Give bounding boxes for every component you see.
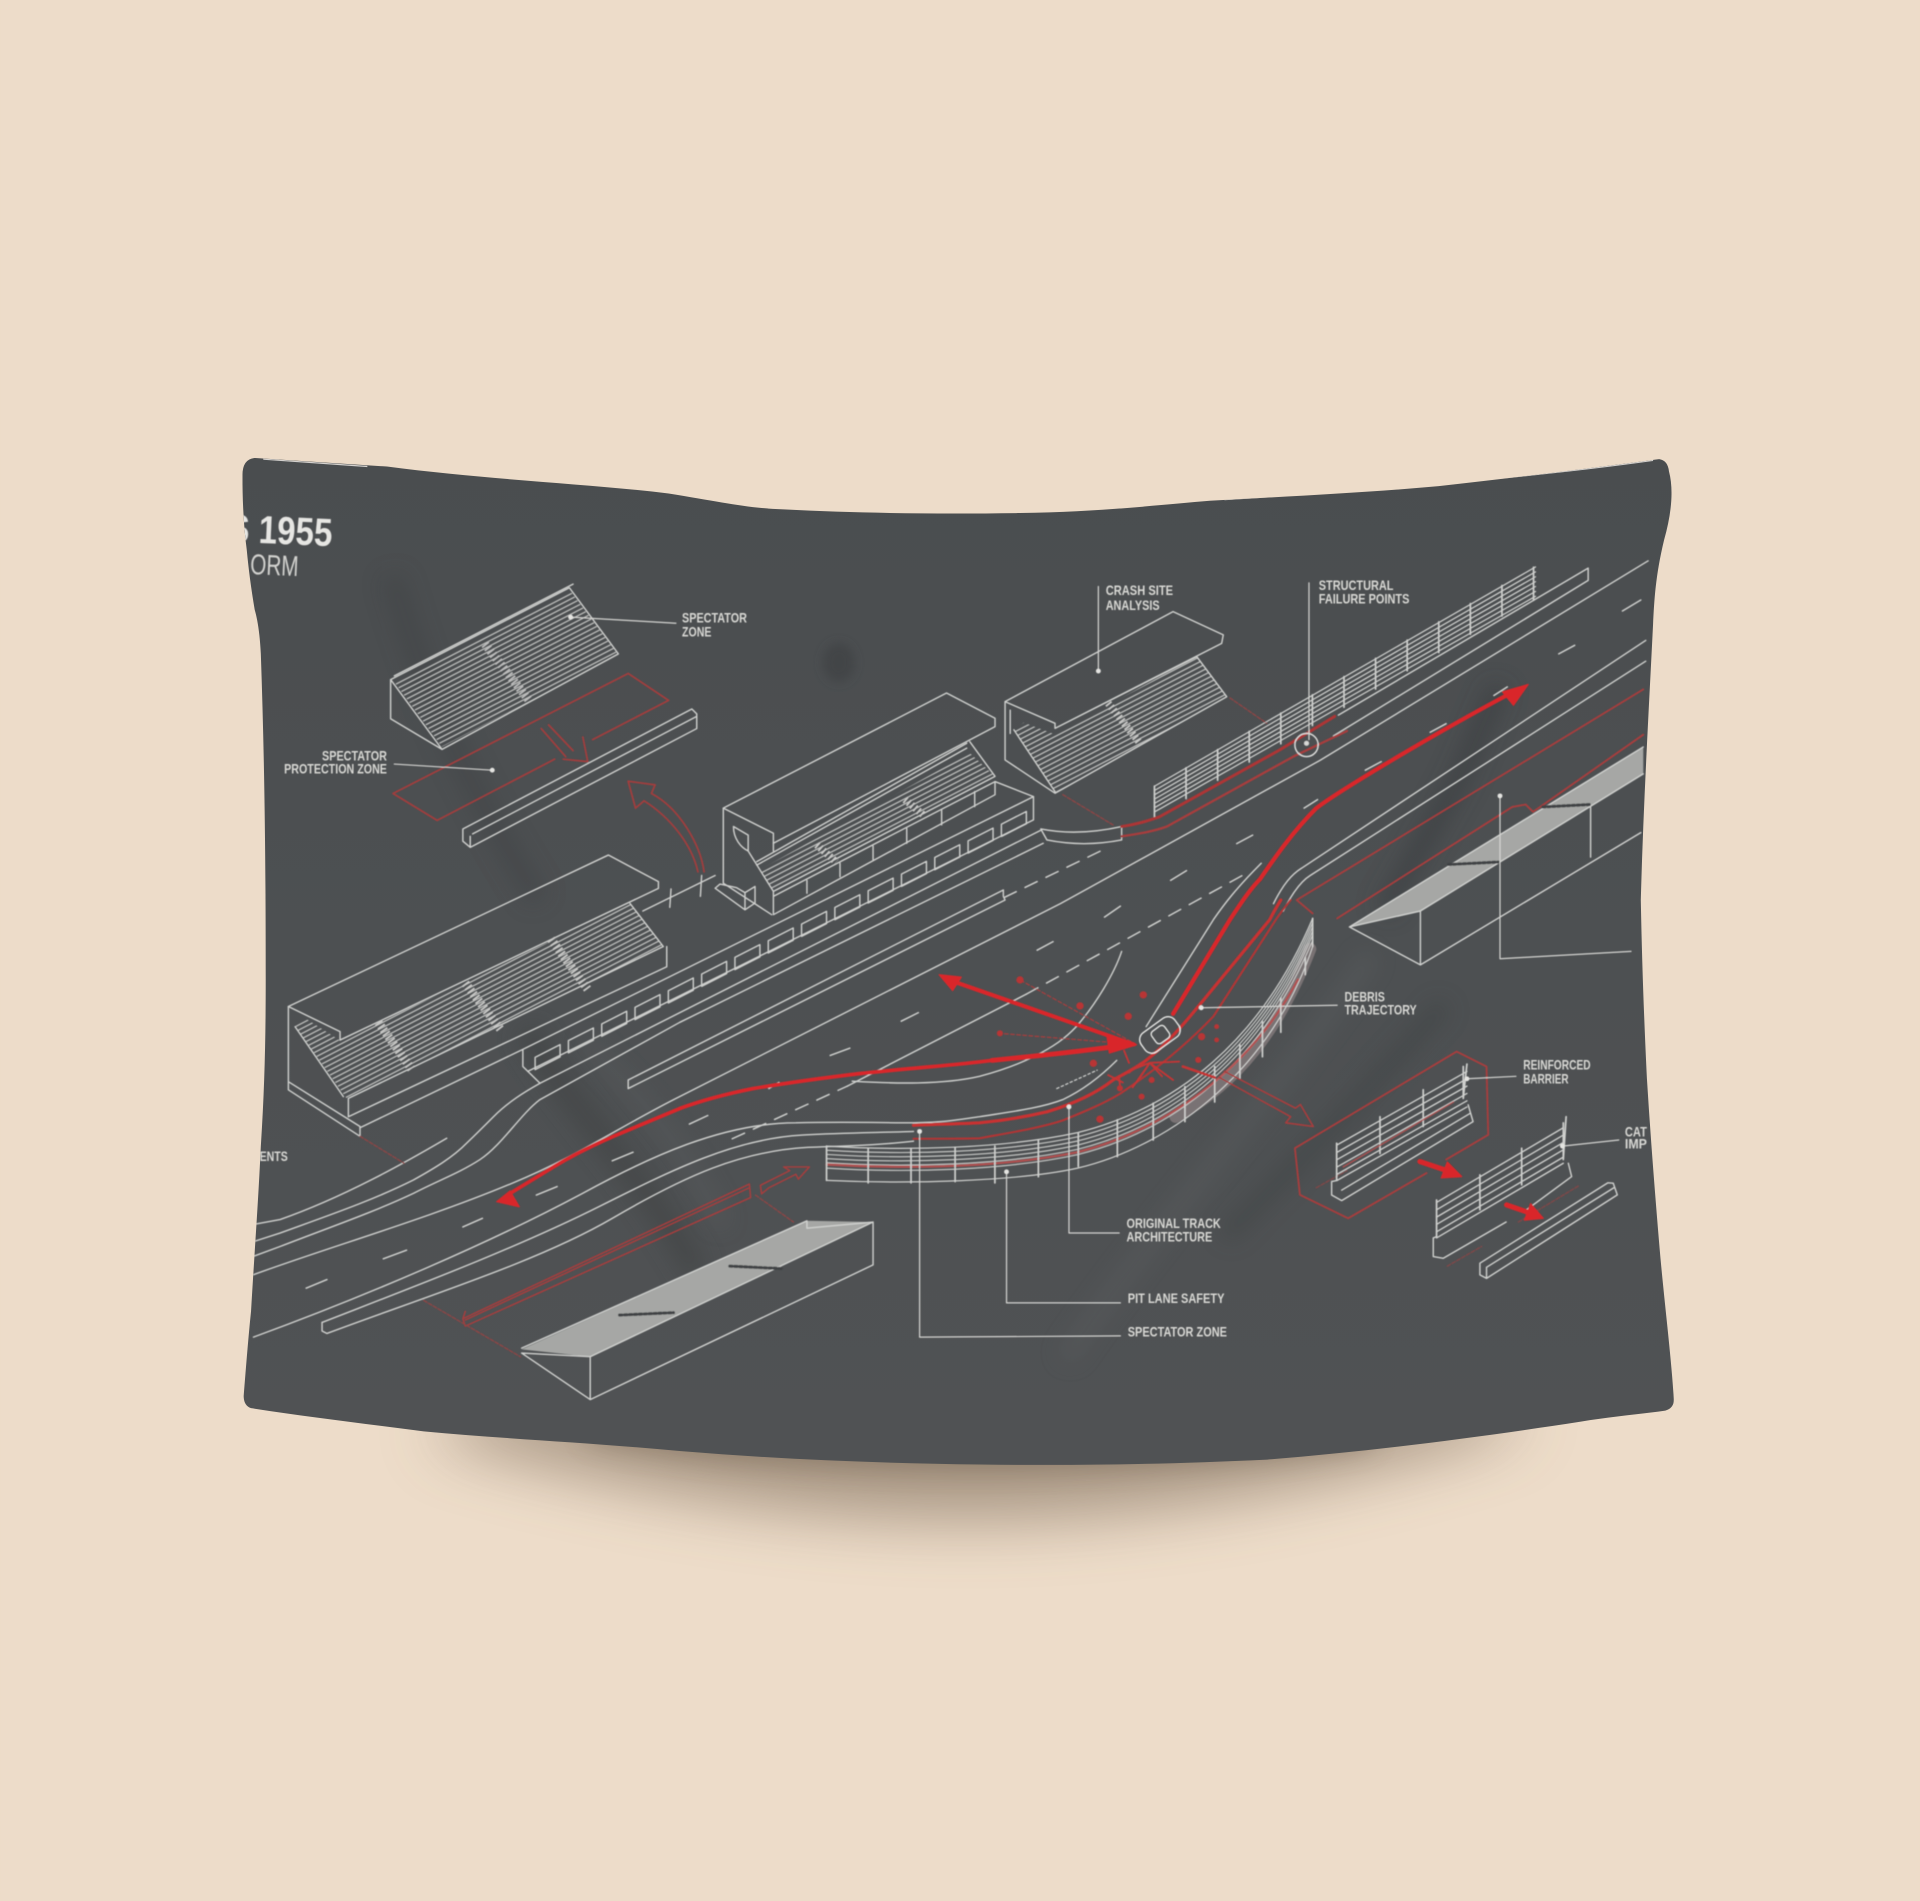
catch fence module xyxy=(1433,1117,1617,1278)
cloth top highlight xyxy=(263,459,1653,500)
upper-right grandstand xyxy=(1005,612,1227,793)
tight contact shadow xyxy=(588,1420,1371,1467)
cloth drop shadow xyxy=(429,1396,1531,1518)
concrete barrier rail xyxy=(463,709,697,847)
title: S 1955 xyxy=(227,506,333,555)
callout labels: ORIGINAL TRACK xyxy=(1127,1216,1221,1231)
callout labels: SPECTATOR xyxy=(682,611,747,626)
callout labels: BARRIER xyxy=(1523,1072,1569,1087)
callout labels: CAT xyxy=(1625,1124,1648,1139)
callout labels: PROTECTION ZONE xyxy=(284,761,387,776)
callout labels: PIT LANE SAFETY xyxy=(1128,1291,1224,1306)
callout labels: ZONE xyxy=(682,625,711,640)
upper road lines xyxy=(253,561,1648,1275)
callout labels: SPECTATOR xyxy=(322,748,387,763)
spectator protection zone xyxy=(393,673,669,820)
callout labels: CRASH SITE xyxy=(1106,583,1173,598)
upper-left spectator stand xyxy=(391,584,618,749)
callout labels: DEBRIS xyxy=(1344,990,1385,1005)
icon: crashed car xyxy=(1136,1013,1184,1057)
pit building row xyxy=(535,811,1026,1070)
thick red trajectory arrows xyxy=(497,684,1543,1220)
curved red arrow xyxy=(628,781,704,872)
large left grandstand xyxy=(288,797,1033,1136)
callout labels: FAILURE POINTS xyxy=(1319,592,1409,607)
callout labels xyxy=(260,578,1648,1340)
lower road curves xyxy=(253,640,1646,1337)
central grandstand with pit boxes xyxy=(643,693,1033,915)
structural failure marker xyxy=(1295,733,1318,757)
callout labels: SPECTATOR ZONE xyxy=(1128,1325,1227,1340)
dashed red construction lines xyxy=(360,698,1580,1357)
callout labels: ANALYSIS xyxy=(1106,598,1160,613)
fabric folds xyxy=(392,576,1500,1359)
lower-left hatched stand xyxy=(522,1221,873,1400)
subtitle: ORM xyxy=(250,549,299,583)
tapestry cloth xyxy=(227,441,1690,1482)
crash debris burst xyxy=(997,976,1219,1123)
callout leader lines xyxy=(394,583,1631,1337)
artwork xyxy=(253,561,1648,1400)
right hatched stand xyxy=(1349,747,1643,965)
outlined debris arrow xyxy=(1220,1071,1313,1127)
callout labels: ENTS xyxy=(260,1149,288,1164)
callout labels: STRUCTURAL xyxy=(1319,578,1393,593)
callout labels: IMP xyxy=(1625,1137,1647,1152)
curved trackside fence xyxy=(827,918,1313,1183)
reinforced barrier module xyxy=(1295,1052,1488,1218)
red reference lines xyxy=(463,689,1643,1326)
lane dashes xyxy=(306,600,1641,1288)
straight trackside fence xyxy=(1154,567,1536,817)
callout labels: TRAJECTORY xyxy=(1344,1002,1417,1017)
callout labels: ARCHITECTURE xyxy=(1127,1230,1212,1245)
callout labels: REINFORCED xyxy=(1523,1058,1591,1073)
